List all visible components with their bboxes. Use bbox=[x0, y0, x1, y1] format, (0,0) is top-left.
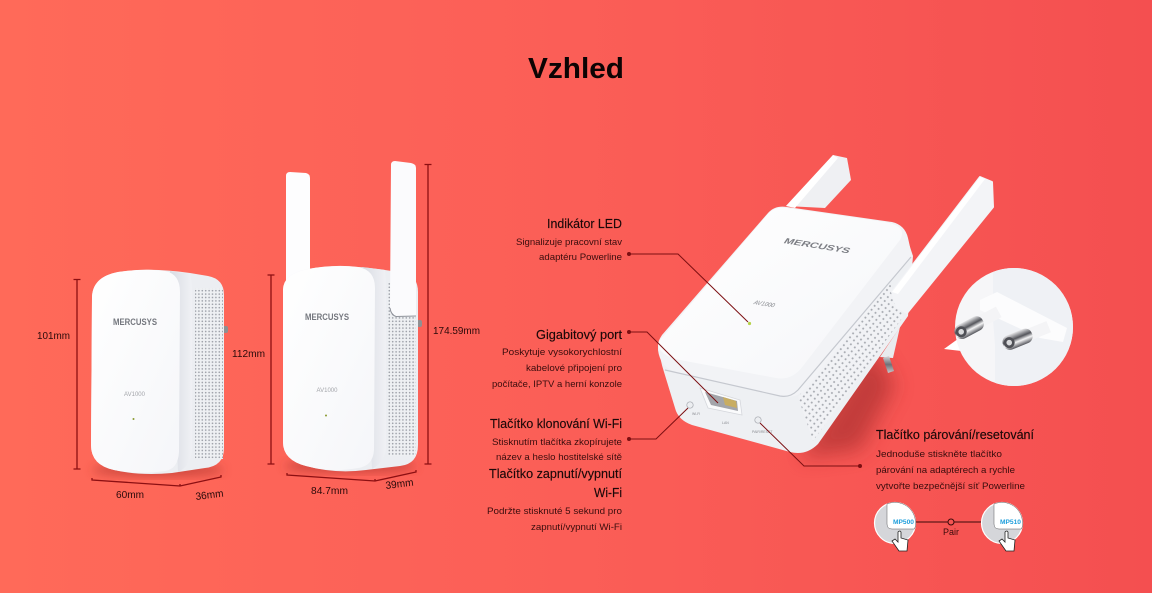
lower body bbox=[659, 232, 913, 453]
plug detail callout bbox=[944, 268, 1073, 386]
label: height: 112mm bbox=[232, 348, 265, 360]
model label: AV1000 bbox=[317, 388, 338, 394]
front face bbox=[91, 270, 180, 473]
text block: pair/reset button: Tlačítko párování/resetování bbox=[876, 427, 1034, 442]
label: depth: 36mm bbox=[195, 488, 224, 503]
pin upper bbox=[952, 305, 1002, 341]
top shell bbox=[658, 207, 912, 397]
LED bbox=[748, 322, 751, 325]
side band bbox=[170, 271, 192, 472]
back antenna bbox=[786, 155, 851, 208]
text block: Wi-Fi clone button: název a heslo hostitelské sítě bbox=[496, 452, 622, 463]
shaded background bbox=[993, 268, 1073, 386]
adapter MP510: MP510 bbox=[1000, 519, 1021, 526]
front buttons bbox=[687, 402, 773, 434]
plug pin bbox=[223, 326, 228, 333]
front face bbox=[283, 266, 375, 470]
label: height: 101mm bbox=[37, 330, 70, 342]
text block: Wi-Fi on/off button: Wi-Fi bbox=[594, 485, 622, 500]
adapter MP500 bbox=[874, 502, 916, 551]
top face bbox=[659, 208, 902, 378]
dimensions: adapter without antennas bbox=[37, 280, 224, 503]
text block: LED indicator: adaptéru Powerline bbox=[539, 252, 622, 263]
text block: Wi-Fi on/off button: Podržte stisknuté 5 sekund pro bbox=[487, 506, 622, 517]
text block: Wi-Fi clone button: Tlačítko klonování Wi-Fi bbox=[490, 416, 622, 431]
connector: pair bbox=[760, 423, 862, 468]
text block: Wi-Fi on/off button bbox=[487, 466, 622, 533]
text block: gigabit port: Poskytuje vysokorychlostní bbox=[502, 347, 622, 358]
front buttons: PAIR/RESET bbox=[752, 430, 773, 434]
text block: Wi-Fi on/off button: zapnutí/vypnutí Wi-Fi bbox=[531, 522, 622, 533]
body silhouette bbox=[283, 266, 418, 471]
grill bbox=[195, 288, 223, 459]
logo: MERCUSYS bbox=[305, 312, 349, 322]
pin lower bbox=[1000, 320, 1051, 352]
text block: pair/reset button bbox=[876, 427, 1034, 492]
logo: MERCUSYS bbox=[113, 317, 157, 327]
text block: Wi-Fi on/off button: Tlačítko zapnutí/vypnutí bbox=[489, 466, 622, 481]
text block: gigabit port: kabelové připojení pro bbox=[526, 363, 622, 374]
device: angled adapter bbox=[658, 155, 993, 458]
label: depth: 39mm bbox=[385, 477, 414, 492]
text block: Wi-Fi clone button bbox=[490, 416, 622, 463]
adapter MP510 bbox=[982, 502, 1023, 551]
text block: pair/reset button: vytvořte bezpečnější síť Powerline bbox=[876, 481, 1025, 492]
body silhouette bbox=[91, 270, 224, 474]
text block: LED indicator: Signalizuje pracovní stav bbox=[516, 237, 622, 248]
connector: Wi-Fi clone bbox=[627, 408, 688, 441]
label: pair: Pair bbox=[943, 527, 959, 537]
grill bbox=[388, 282, 416, 456]
pairing diagram bbox=[874, 502, 1023, 551]
connector: LED bbox=[627, 252, 748, 322]
front antenna bbox=[892, 177, 993, 313]
label: width: 84.7mm bbox=[311, 485, 348, 497]
adapter MP500: MP500 bbox=[893, 519, 914, 526]
model label: AV1000 bbox=[124, 392, 146, 398]
grill side bbox=[798, 283, 903, 441]
plug stub bbox=[880, 327, 900, 358]
front buttons: LAN bbox=[722, 421, 729, 425]
label: width: 60mm bbox=[116, 489, 144, 501]
plug pin bbox=[883, 356, 894, 373]
LED bbox=[132, 418, 134, 420]
left antenna bbox=[286, 172, 310, 285]
title: Vzhled bbox=[528, 53, 624, 85]
text block: LED indicator: Indikátor LED bbox=[547, 216, 622, 231]
text block: LED indicator bbox=[516, 216, 622, 263]
text block: gigabit port: Gigabitový port bbox=[536, 327, 622, 342]
text block: gigabit port bbox=[492, 327, 622, 390]
device: adapter without antennas bbox=[91, 270, 228, 476]
LED bbox=[325, 414, 327, 416]
seam line bbox=[665, 257, 911, 396]
label: total height: 174.59mm bbox=[433, 325, 480, 337]
side band bbox=[362, 267, 386, 469]
right antenna bbox=[390, 161, 416, 316]
text block: gigabit port: počítače, IPTV a herní konzole bbox=[492, 379, 622, 390]
model label: AV1000 bbox=[752, 300, 777, 309]
device: adapter with antennas bbox=[283, 161, 422, 472]
plug pin bbox=[417, 320, 422, 327]
connector: gigabit port bbox=[627, 330, 718, 403]
logo: MERCUSYS bbox=[782, 236, 853, 255]
LAN port bbox=[700, 388, 742, 415]
text block: pair/reset button: Jednoduše stiskněte tlačítko bbox=[876, 449, 1002, 460]
text block: pair/reset button: párování na adaptérech a rychle bbox=[876, 465, 1015, 476]
front buttons: Wi-Fi bbox=[692, 412, 700, 416]
text block: Wi-Fi clone button: Stisknutím tlačítka zkopírujete bbox=[492, 437, 622, 448]
plug body bbox=[993, 292, 1067, 342]
dimensions: adapter with antennas bbox=[232, 164, 480, 497]
